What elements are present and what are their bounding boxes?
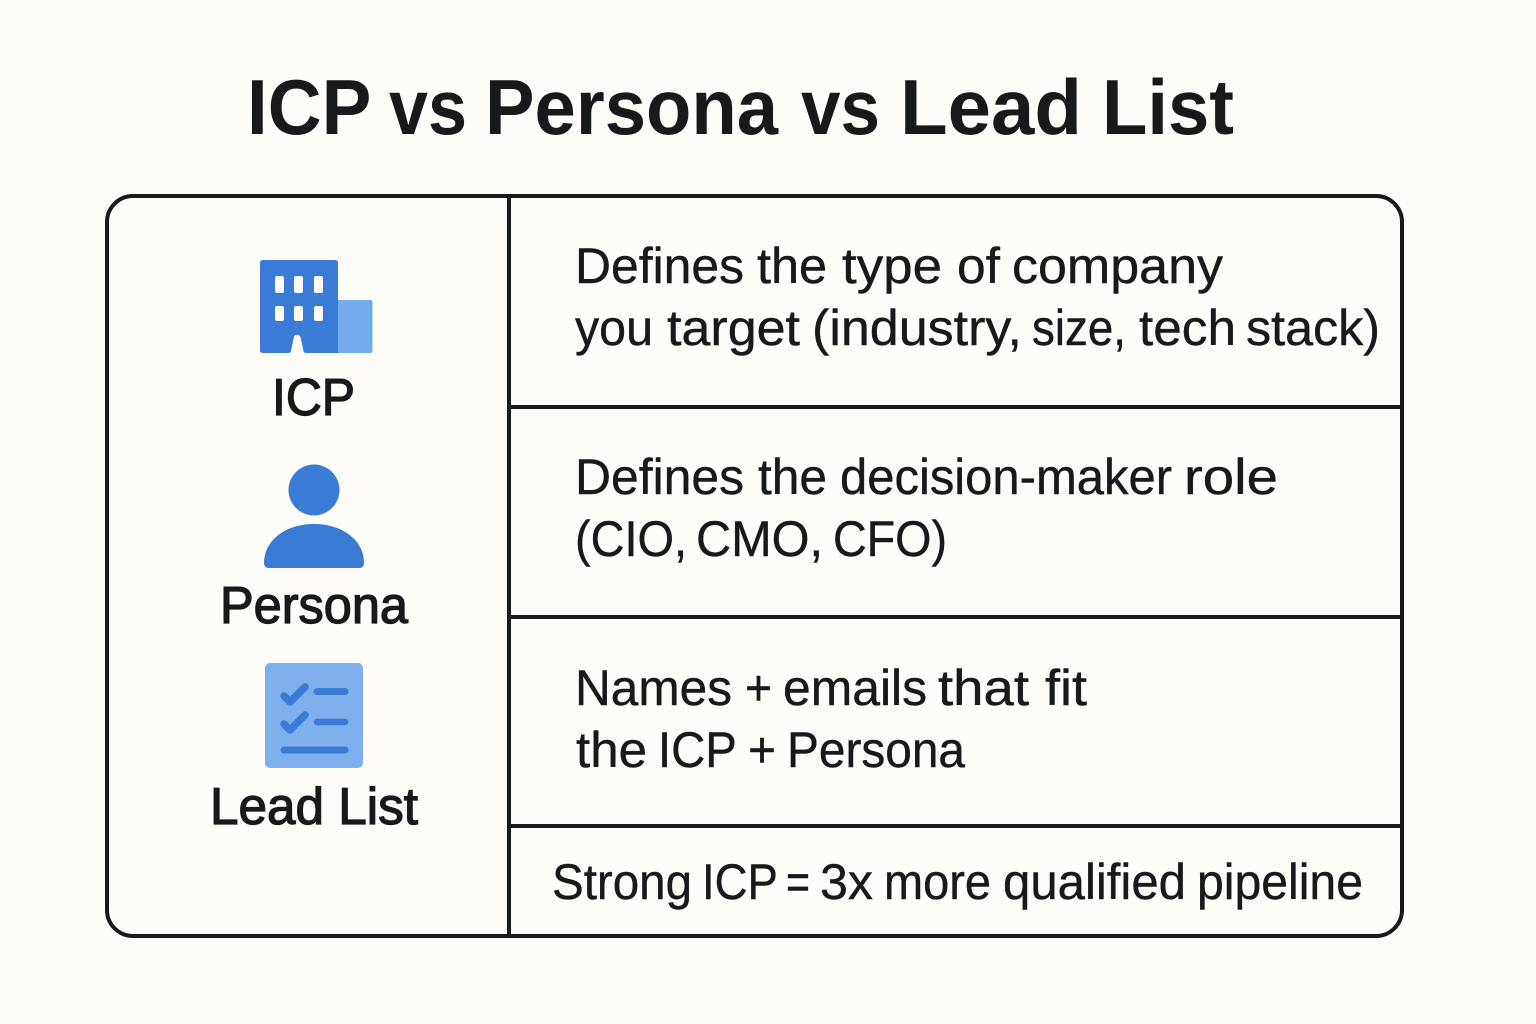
callout: pipeline stat: = [786,854,810,910]
callout: pipeline stat: more [884,854,991,910]
text block: ICP definition: of [957,238,1000,294]
text block: ICP definition: type [842,238,942,294]
text block: ICP definition: size, [1032,300,1126,356]
label: Persona: Persona [220,577,408,635]
icon: checklist [265,663,363,768]
text block: Lead List definition: Persona [787,722,965,778]
text block: Persona definition [575,449,1278,567]
text block: Persona definition: decision-maker [840,449,1172,505]
callout: pipeline stat: ICP [702,854,777,910]
text block: Lead List definition: + [745,660,772,716]
text block: Persona definition: Defines [575,449,744,505]
text block: ICP definition: company [1012,238,1223,294]
callout: pipeline stat: 3x [820,854,873,910]
panel: terms column [210,260,419,836]
text block: ICP definition: Defines [575,238,744,294]
text block: ICP definition: you [575,300,653,356]
callout: pipeline stat: qualified [1003,854,1186,910]
icon: office building [260,260,372,353]
icon: person [264,464,364,568]
text block: Lead List definition: the [576,722,647,778]
title: vs [801,63,880,151]
text block: Lead List definition: + [748,722,776,778]
text block: Persona definition: CFO) [833,511,947,567]
title: ICP [247,63,370,151]
text block: ICP definition [575,238,1380,356]
text block: ICP definition: (industry, [812,300,1022,356]
callout: pipeline stat: pipeline [1197,854,1363,910]
text block: ICP definition: the [757,238,827,294]
comparison table [107,196,1402,936]
text block: Lead List definition [575,660,1087,778]
text block: ICP definition: target [667,300,800,356]
text block: Lead List definition: emails [783,660,927,716]
title: List [1102,63,1234,151]
text block: Lead List definition: ICP [658,722,736,778]
text block: Persona definition: role [1184,449,1278,505]
title: vs [389,63,467,151]
text block: Persona definition: the [758,449,827,505]
text block: Lead List definition: that [938,660,1029,716]
label: ICP: ICP [272,369,355,427]
text block: Persona definition: (CIO, [575,511,687,567]
text block: Persona definition: CMO, [696,511,823,567]
callout: pipeline stat: Strong [552,854,692,910]
text block: Lead List definition: fit [1045,660,1087,716]
text block: ICP definition: stack) [1246,300,1380,356]
text block: ICP definition: tech [1139,300,1236,356]
title: Persona [485,63,779,151]
text block: Lead List definition: Names [575,660,732,716]
label: Lead List: Lead List [210,778,419,836]
title: Lead [900,63,1082,151]
